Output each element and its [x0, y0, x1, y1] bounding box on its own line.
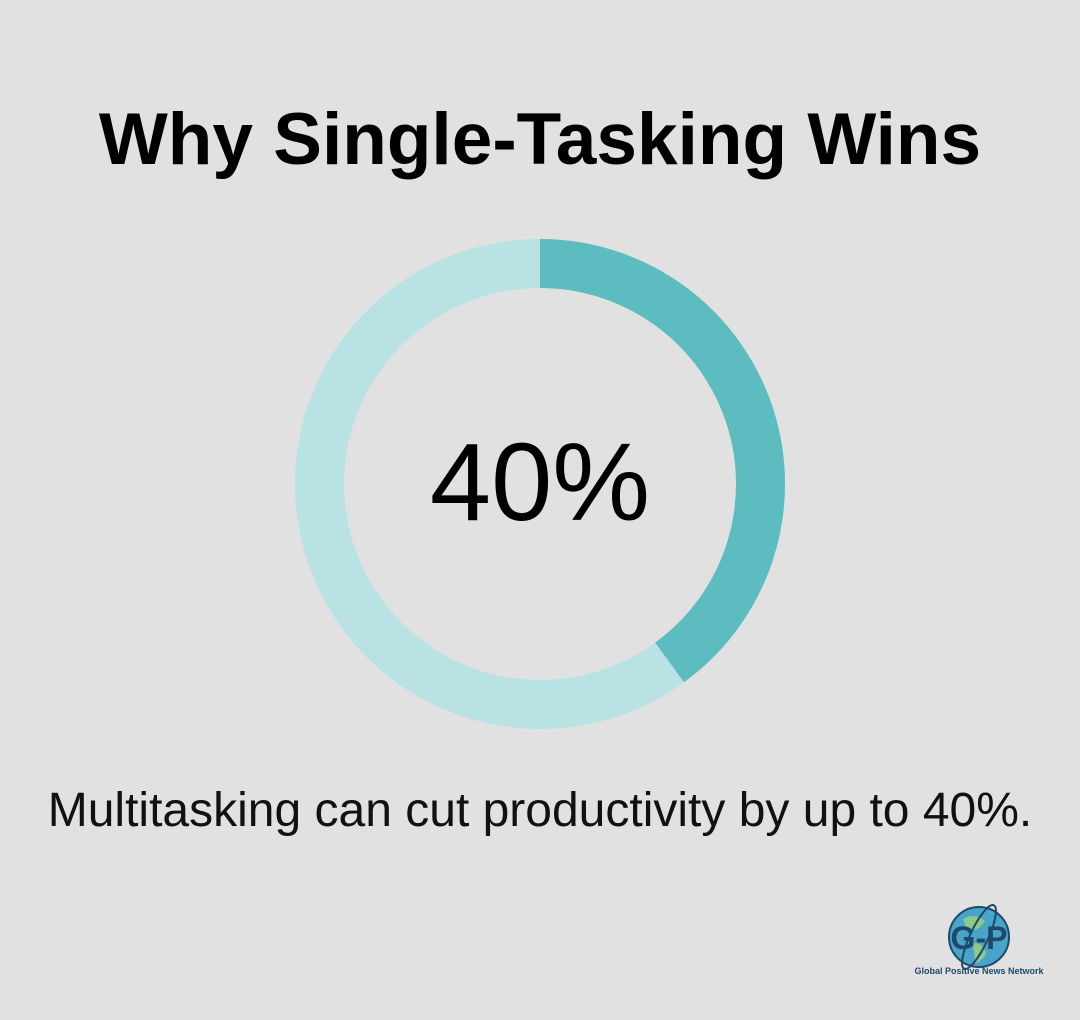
logo: Global Positive News Network	[915, 966, 1045, 976]
title: Why Single-Tasking Wins	[99, 99, 981, 180]
logo: G-P	[951, 920, 1007, 956]
logo	[915, 904, 1045, 976]
big number: 40%	[430, 421, 650, 544]
caption: Multitasking can cut productivity by up to 40%.	[48, 784, 1032, 837]
